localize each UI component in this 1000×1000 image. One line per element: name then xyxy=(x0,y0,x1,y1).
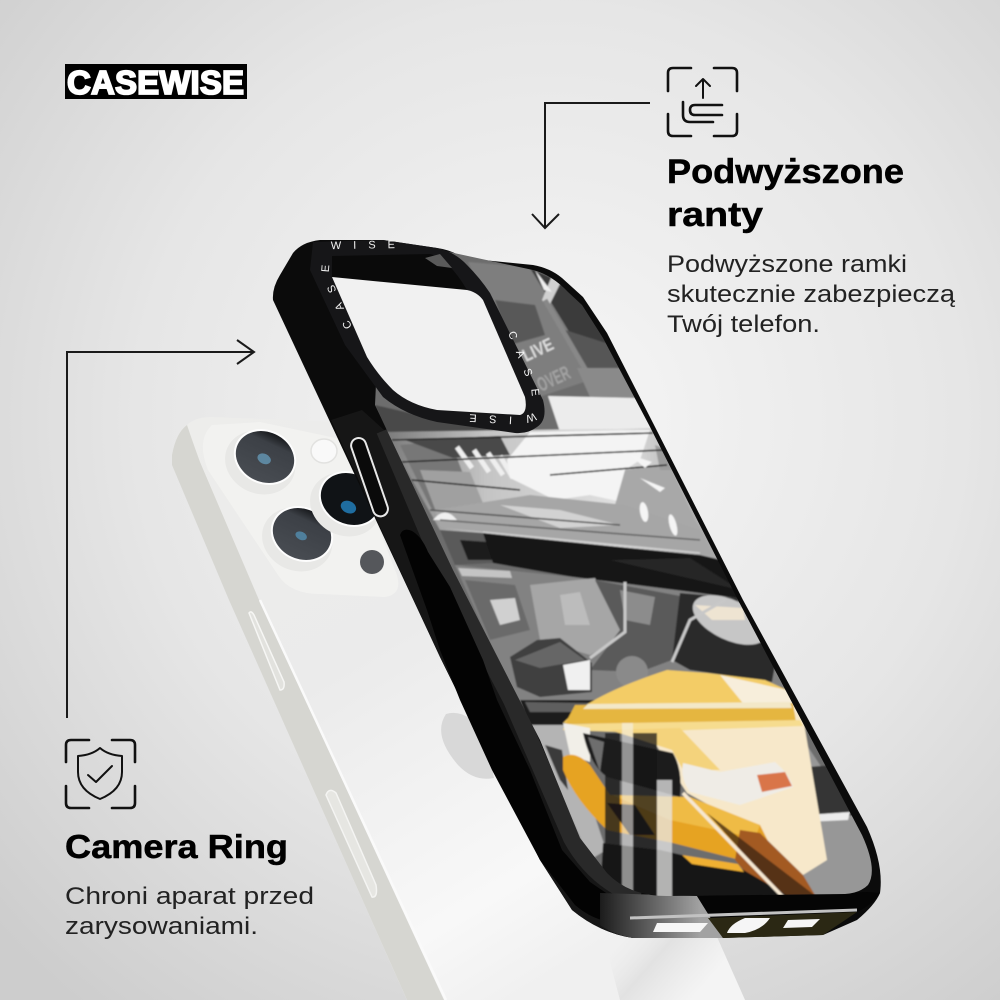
phone lower shading xyxy=(600,925,745,1000)
striped awning xyxy=(457,447,513,478)
diagonal line xyxy=(683,793,783,897)
ring gloss accent xyxy=(425,254,452,268)
text: camera ring description: Chroni aparat przed xyxy=(65,883,314,910)
gray block above white band xyxy=(577,368,640,398)
power lines xyxy=(392,433,700,540)
diagonal wedge xyxy=(707,813,817,897)
light curved streak xyxy=(590,582,725,662)
taxi upper body xyxy=(563,670,803,723)
white headlight xyxy=(563,660,590,690)
translucent side where phone shows through xyxy=(331,410,712,938)
text: raised edges description: Podwyższone ramki xyxy=(667,251,907,278)
text: camera ring description xyxy=(65,883,314,940)
top gray facades xyxy=(468,262,590,400)
phone body xyxy=(172,417,745,1000)
silver lip line xyxy=(630,910,857,918)
dark strip near ring xyxy=(376,405,495,432)
printed back panel xyxy=(370,250,890,910)
white phone behind the case xyxy=(172,416,745,1000)
sign text second line: OVER xyxy=(534,362,574,397)
windshield xyxy=(583,733,681,797)
ring inner wall xyxy=(332,254,467,290)
icon: shield check xyxy=(66,740,135,808)
lens right xyxy=(300,458,392,548)
olive bottom lip xyxy=(708,912,857,938)
phone side band xyxy=(172,425,444,1000)
camera ring xyxy=(310,240,545,433)
dark strip over car roof xyxy=(520,699,594,726)
side button upper xyxy=(249,612,284,690)
pale facade block xyxy=(548,396,655,432)
crowd xyxy=(465,580,530,640)
gray textured belt xyxy=(456,494,680,550)
black bottom bar xyxy=(697,892,880,920)
taxi orange shade xyxy=(735,830,815,895)
camera plateau xyxy=(203,422,398,597)
headlight xyxy=(682,762,793,805)
sign text: LIVE xyxy=(519,334,557,366)
ring brand text right: CASEWISE xyxy=(470,332,540,424)
side button lower xyxy=(326,790,376,897)
lower-left gray street xyxy=(530,725,606,860)
heading: camera ring: Camera Ring xyxy=(65,828,288,865)
phone case xyxy=(272,240,881,938)
gray street section xyxy=(455,565,800,710)
left box xyxy=(440,530,493,565)
taxi white hood left xyxy=(563,723,590,762)
taxi hood cream area xyxy=(656,711,828,876)
dark upper-left awning xyxy=(405,436,510,458)
flash xyxy=(311,439,337,463)
dark lower intake xyxy=(607,803,655,835)
camera window opening xyxy=(332,277,526,415)
right gray background xyxy=(802,748,872,894)
apple logo shadow xyxy=(441,713,494,779)
pale distance xyxy=(530,578,625,655)
heading: raised edges: Podwyższone xyxy=(667,153,904,191)
taxi side panel xyxy=(563,755,770,860)
text: raised edges description: Twój telefon. xyxy=(667,311,820,338)
white birds xyxy=(638,458,678,536)
band highlight xyxy=(260,600,446,1000)
gray right wedge xyxy=(615,466,696,528)
case outer shell xyxy=(273,240,881,938)
grille xyxy=(682,855,744,872)
text: raised edges description xyxy=(667,251,956,338)
ring brand text left: CASEWISE xyxy=(321,240,394,328)
van xyxy=(590,580,680,672)
small sensor xyxy=(360,550,384,574)
parked dark car xyxy=(510,638,592,697)
deep black slot in side xyxy=(400,530,629,921)
white streak shape xyxy=(507,430,650,503)
side button xyxy=(349,436,390,518)
panel base xyxy=(375,252,826,894)
heading: raised edges: ranty xyxy=(667,196,763,234)
left gray building xyxy=(401,443,462,510)
yellow hood centre xyxy=(610,728,720,770)
lens top xyxy=(215,416,307,506)
icon: upload raised edges xyxy=(668,68,737,136)
arrow: camera ring xyxy=(67,340,254,718)
text: camera ring description: zarysowaniami. xyxy=(65,913,258,940)
white arch xyxy=(433,512,457,520)
black street band xyxy=(483,533,745,600)
heading: raised edges xyxy=(667,153,904,234)
translucent bottom lip xyxy=(600,893,723,938)
wheel area xyxy=(672,593,775,682)
bottom black xyxy=(600,843,790,897)
lens bottom xyxy=(252,493,344,583)
logo: CASEWISE xyxy=(67,64,244,101)
vertical stripes xyxy=(605,723,672,897)
street level mid band xyxy=(385,428,720,560)
text: raised edges description: skutecznie zabezpieczą xyxy=(667,281,956,308)
gray band beside art xyxy=(385,430,640,897)
arrow: raised edges xyxy=(532,103,650,228)
taxi yellow band xyxy=(565,703,796,724)
port holes xyxy=(653,918,820,933)
small sign strip xyxy=(458,568,512,578)
